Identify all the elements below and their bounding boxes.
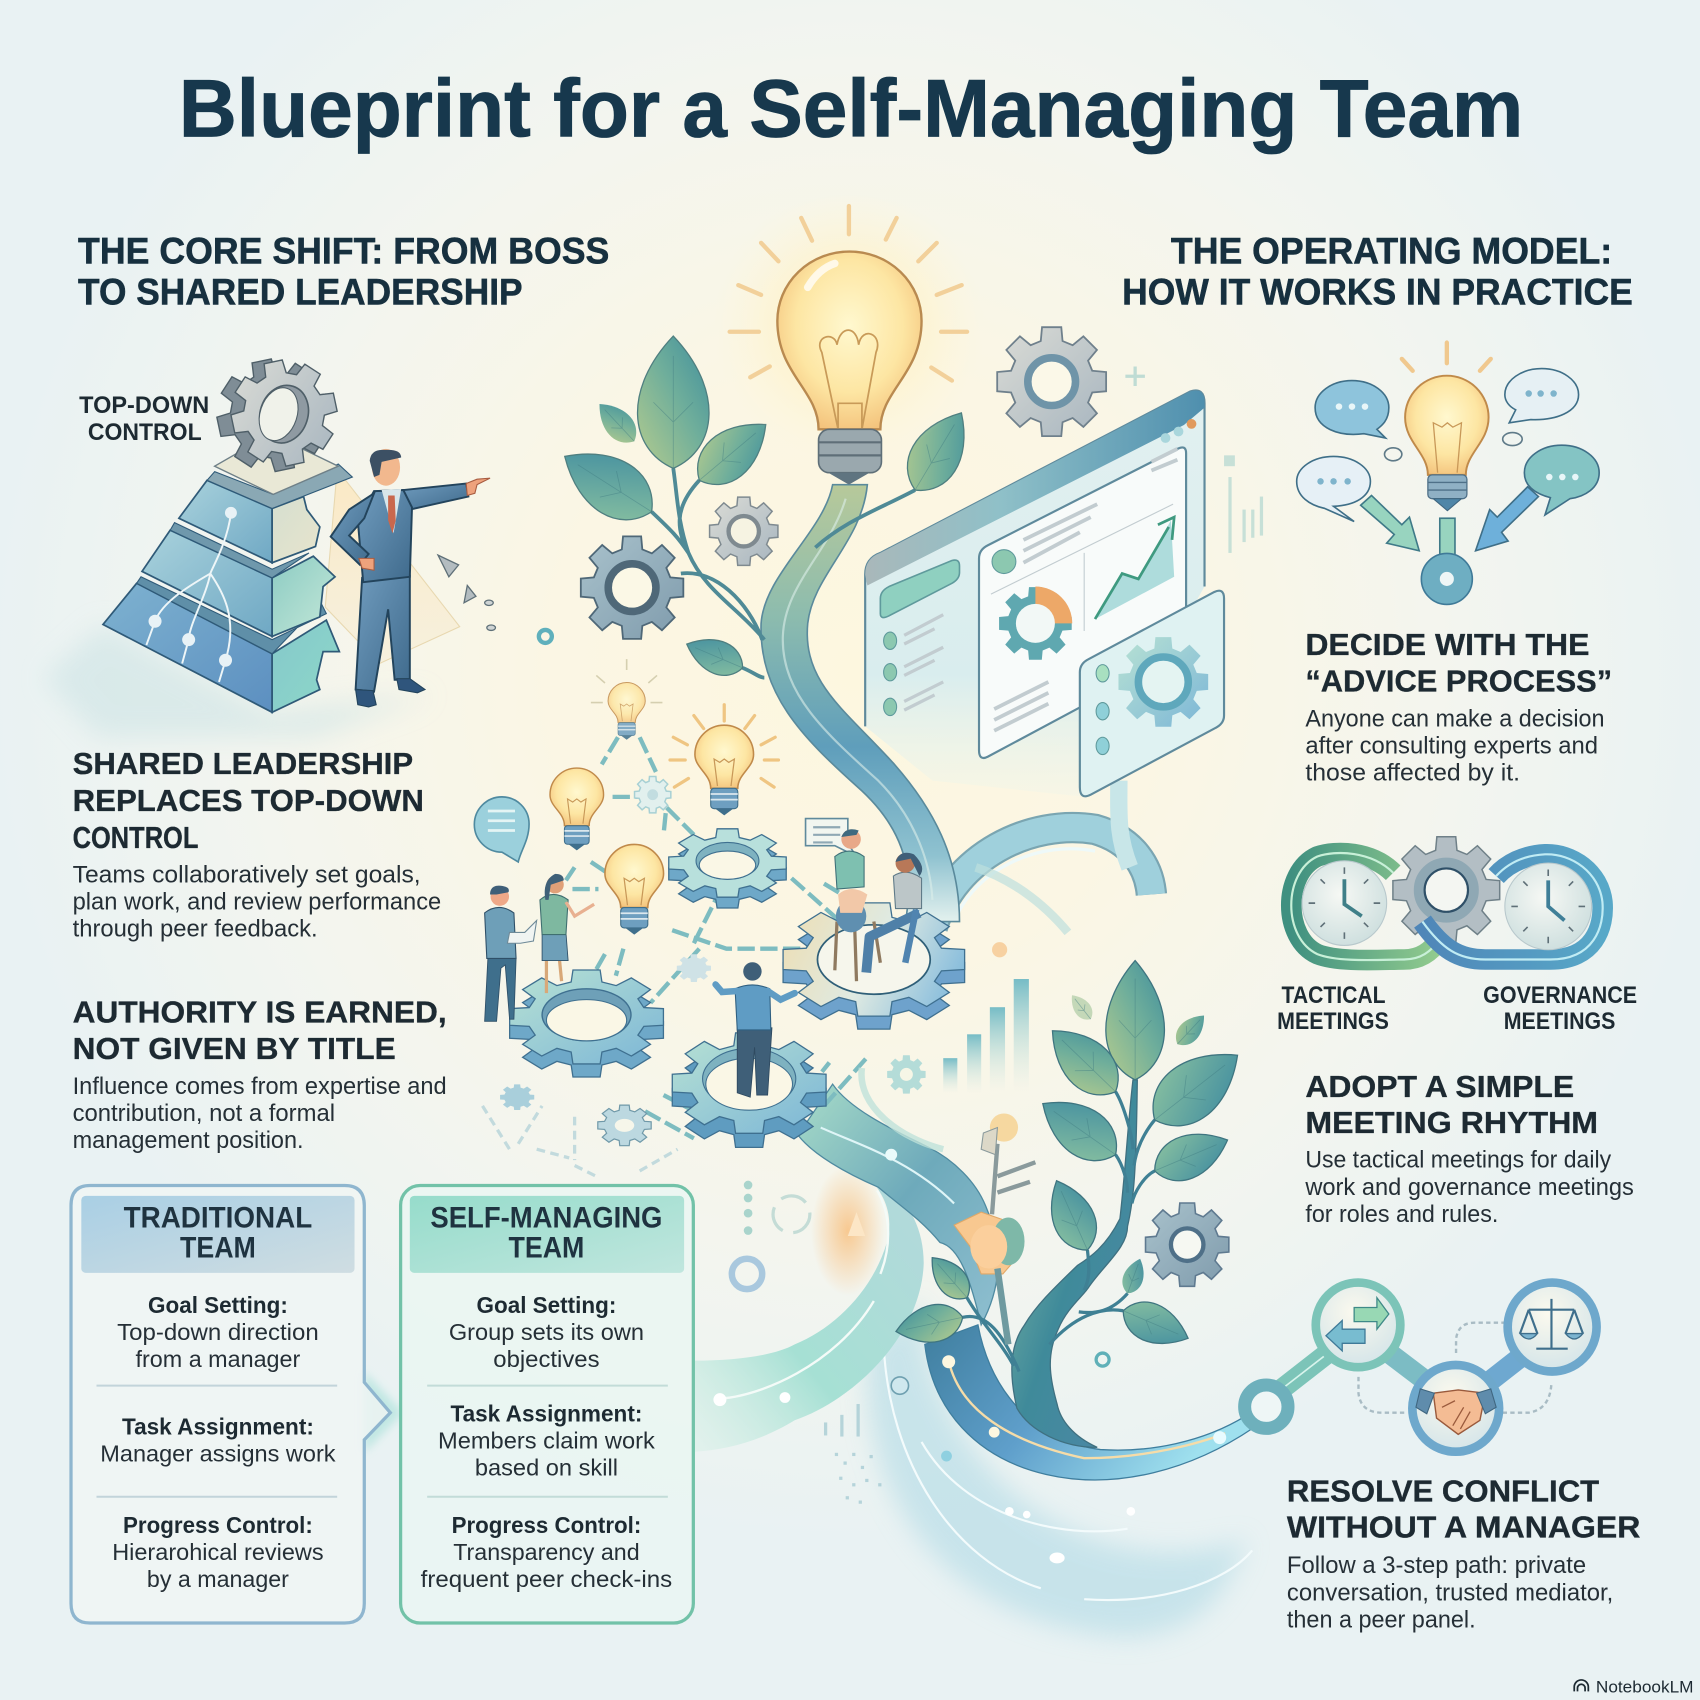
shared leadership text block — [73, 746, 441, 943]
circle: handshake — [1412, 1365, 1499, 1452]
ground shadow — [43, 624, 434, 737]
vine branches — [652, 468, 915, 678]
advice process text block: after consulting experts and — [1305, 733, 1598, 760]
gear — [1393, 837, 1500, 944]
donut gear — [999, 587, 1072, 660]
gear: bottom — [672, 1033, 826, 1147]
meeting rhythm text block: ADOPT A SIMPLE — [1305, 1069, 1574, 1104]
authority text block — [73, 994, 447, 1154]
title: Blueprint for a Self-Managing Team — [179, 64, 1523, 155]
far small chart — [1224, 455, 1263, 553]
bulb: left — [550, 768, 604, 850]
sidebar — [880, 560, 960, 618]
gear: left — [510, 970, 663, 1077]
conflict text block — [1287, 1474, 1640, 1633]
panel: traditional team: Goal Setting: — [148, 1292, 288, 1318]
advice process text block: “ADVICE PROCESS” — [1305, 664, 1612, 699]
panel: self-managing team: based on skill — [475, 1455, 618, 1481]
advice process text block: those affected by it. — [1305, 760, 1520, 787]
panel: traditional team: Progress Control: — [123, 1512, 313, 1538]
pyramid illustration — [43, 349, 495, 737]
conflict text block: RESOLVE CONFLICT — [1287, 1474, 1599, 1509]
panel: traditional team: Top-down direction — [117, 1319, 319, 1345]
section heading: operating model — [1122, 230, 1633, 313]
label: top-down control: TOP-DOWN — [79, 392, 209, 419]
panel text lines — [994, 449, 1177, 731]
arrow: blue — [1476, 487, 1538, 551]
icon bulb — [1402, 343, 1491, 511]
person: man standing on gear — [716, 962, 795, 1097]
meeting rhythm text block: Use tactical meetings for daily — [1305, 1147, 1611, 1174]
circle: scales — [1508, 1283, 1597, 1371]
authority text block: Influence comes from expertise and — [73, 1073, 447, 1100]
conflict text block: then a peer panel. — [1287, 1606, 1476, 1633]
section heading: core shift: TO SHARED LEADERSHIP — [78, 272, 523, 313]
panel: traditional team — [71, 1186, 390, 1623]
pointing arm and hand — [403, 484, 468, 510]
authority text block: management position. — [73, 1127, 304, 1154]
teal flow from comparison tables — [695, 1176, 924, 1452]
meeting labels: GOVERNANCE — [1483, 982, 1637, 1009]
dashed network links — [566, 737, 867, 1138]
front panel gear — [1118, 637, 1208, 727]
shared leadership text block: Teams collaboratively set goals, — [73, 862, 421, 889]
orange glow — [811, 1165, 885, 1296]
blossom — [954, 1113, 1035, 1344]
shoes — [356, 690, 376, 707]
head — [372, 449, 400, 486]
shared leadership text block: through peer feedback. — [73, 916, 318, 943]
trousers — [356, 576, 410, 692]
meeting rhythm text block: for roles and rules. — [1305, 1201, 1498, 1228]
panel: traditional team: Manager assigns work — [100, 1440, 336, 1466]
authority text block: AUTHORITY IS EARNED, — [73, 994, 447, 1029]
bar chart decoration — [943, 979, 1029, 1093]
big lightbulb — [713, 190, 984, 485]
section heading: core shift: THE CORE SHIFT: FROM BOSS — [78, 230, 609, 271]
sand pyramid — [325, 469, 460, 664]
window controls — [1161, 419, 1196, 443]
green and blue flowing band under gear — [798, 1084, 998, 1325]
notebooklm mark: NotebookLM — [1596, 1678, 1693, 1696]
tree side gear — [1146, 1203, 1229, 1286]
jacket — [358, 490, 412, 582]
advice process text block — [1305, 627, 1612, 787]
businessman pointing — [331, 449, 490, 707]
dotted links — [1358, 1323, 1551, 1413]
panel: self-managing team: TEAM — [508, 1233, 584, 1265]
icon: conflict resolution path — [1245, 1283, 1597, 1452]
light arcs in the swirl — [884, 1344, 1252, 1600]
panel: traditional team: TEAM — [180, 1233, 256, 1265]
meeting rhythm text block: MEETING RHYTHM — [1305, 1105, 1598, 1140]
shards — [438, 555, 495, 630]
panel: self-managing team: Task Assignment: — [450, 1400, 642, 1426]
tier 2 — [142, 530, 272, 636]
shared leadership text block: plan work, and review performance — [73, 889, 441, 916]
meeting labels: MEETINGS — [1504, 1008, 1615, 1035]
label: top-down control: CONTROL — [88, 419, 202, 446]
circle: talk — [1316, 1283, 1400, 1367]
root swirl — [925, 1325, 1253, 1480]
label: top-down control — [79, 392, 209, 446]
meeting labels: TACTICAL — [1282, 982, 1386, 1009]
tier 3 — [103, 583, 272, 712]
pixel dots — [824, 1404, 881, 1504]
section heading: operating model: HOW IT WORKS IN PRACTICE — [1122, 272, 1633, 313]
speech bubbles — [1297, 369, 1599, 521]
upper vine — [761, 485, 960, 922]
glowing nodes on teal flow — [713, 1392, 790, 1406]
panel: self-managing team: SELF-MANAGING — [430, 1202, 662, 1234]
panel: self-managing team — [401, 1186, 693, 1623]
conflict text block: WITHOUT A MANAGER — [1287, 1509, 1640, 1544]
section heading: core shift — [78, 230, 609, 313]
panel: self-managing team: Transparency and — [453, 1539, 640, 1565]
line chart — [1095, 520, 1174, 619]
panel: self-managing team: Group sets its own — [449, 1319, 644, 1345]
meeting labels — [1277, 982, 1637, 1035]
meeting rhythm text block: work and governance meetings — [1304, 1174, 1634, 1201]
bent arm — [331, 493, 374, 565]
bulb: pale — [591, 659, 662, 740]
blue loop — [1422, 854, 1603, 960]
panel: self-managing team: Members claim work — [438, 1427, 655, 1453]
clock: tactical — [1302, 861, 1387, 945]
shared leadership text block: REPLACES TOP-DOWN — [73, 783, 424, 818]
idea network — [474, 659, 965, 1176]
meeting labels: MEETINGS — [1277, 1008, 1389, 1035]
soft swirl behind the lower roots — [867, 1301, 1247, 1637]
advice process text block: Anyone can make a decision — [1305, 705, 1605, 732]
gear: top — [669, 829, 786, 908]
person: woman — [540, 874, 594, 993]
conflict text block: Follow a 3-step path: private — [1287, 1552, 1586, 1579]
panel: traditional team: from a manager — [136, 1346, 301, 1372]
front panel dots — [1096, 665, 1109, 755]
connectors — [1275, 1344, 1339, 1394]
speech note — [806, 819, 857, 857]
tree leaves — [892, 961, 1255, 1356]
bulb: large with rays — [670, 705, 778, 815]
authority text block: contribution, not a formal — [73, 1100, 335, 1127]
panel: traditional team: TRADITIONAL — [124, 1202, 312, 1234]
person: man with tablet — [485, 886, 537, 1021]
shared leadership text block: CONTROL — [73, 820, 198, 855]
bulb: middle — [605, 844, 664, 935]
panel: traditional team: by a manager — [147, 1566, 289, 1592]
floating gears — [539, 327, 1145, 643]
shirt and tie — [382, 489, 401, 533]
arrow: green — [1361, 495, 1419, 551]
meeting rhythm text block — [1304, 1069, 1634, 1228]
decoration: ring — [732, 1259, 762, 1289]
small faded gear — [887, 1055, 926, 1094]
tier 1 — [179, 480, 272, 563]
panel: self-managing team: objectives — [493, 1346, 600, 1372]
clock: governance — [1505, 863, 1592, 950]
panel: self-managing team: Goal Setting: — [476, 1292, 616, 1318]
small network gears — [635, 777, 671, 813]
icon: meeting rhythm loop — [1277, 837, 1637, 1035]
ring: start — [1245, 1385, 1288, 1428]
speech bubble — [474, 797, 529, 862]
panel: traditional team: Hierarohical reviews — [112, 1539, 324, 1565]
icon: advice process — [1297, 343, 1599, 604]
panel: self-managing team: frequent peer check-ins — [421, 1566, 672, 1592]
green loop — [1291, 853, 1440, 960]
top gear — [207, 349, 346, 481]
glow between comparison tables — [364, 1371, 403, 1453]
section heading: operating model: THE OPERATING MODEL: — [1171, 230, 1612, 271]
advice process text block: DECIDE WITH THE — [1305, 627, 1589, 662]
key stem and node — [1421, 518, 1472, 604]
front panel — [1080, 591, 1224, 796]
second loop from monitor — [932, 828, 1151, 927]
gear: right — [783, 903, 965, 1029]
people: seated pair — [806, 819, 922, 981]
bulb rays — [730, 206, 967, 381]
authority text block: NOT GIVEN BY TITLE — [73, 1031, 396, 1066]
conflict text block: conversation, trusted mediator, — [1287, 1579, 1613, 1606]
dashboard panel — [979, 447, 1186, 758]
shared leadership text block: SHARED LEADERSHIP — [73, 746, 413, 781]
white org lines — [146, 513, 231, 682]
panel: traditional team: Task Assignment: — [122, 1413, 314, 1439]
tree trunk and branches — [892, 961, 1255, 1447]
panel: self-managing team: Progress Control: — [452, 1512, 641, 1538]
top slab — [215, 434, 338, 494]
small decorations left of flow — [744, 1181, 752, 1235]
sidebar list — [884, 632, 897, 716]
monitor dashboard — [865, 390, 1263, 867]
upper leaves — [550, 336, 982, 683]
